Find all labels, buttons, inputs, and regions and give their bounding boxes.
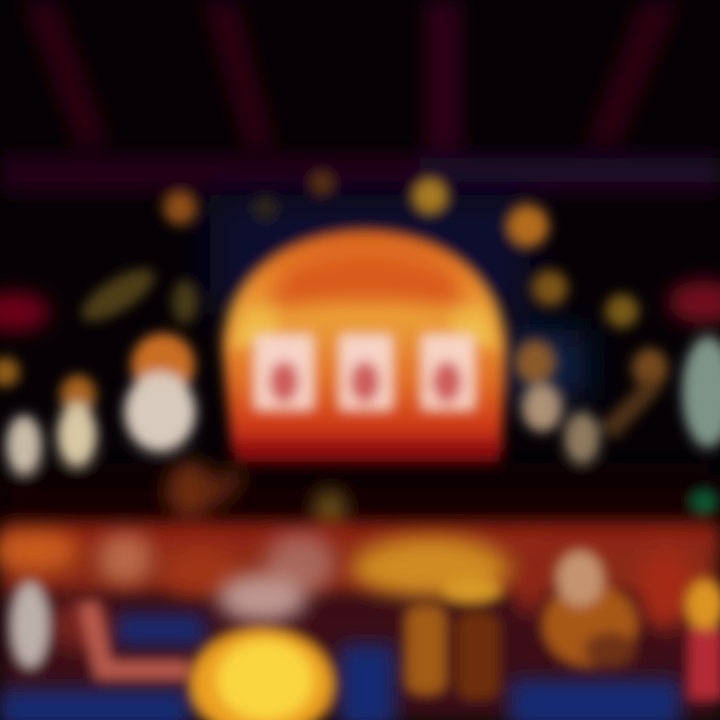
floor base (0, 530, 720, 600)
reel: right (421, 334, 475, 410)
figure: small (0, 357, 42, 475)
person: right (542, 550, 638, 668)
ceiling beams (0, 0, 720, 193)
red side lights (0, 280, 720, 332)
bright yellow orb (190, 628, 334, 720)
person: left white (10, 581, 50, 669)
person: pink arm (78, 600, 190, 680)
person: brown centre right (405, 577, 502, 700)
person: far right (685, 579, 720, 700)
yellow dome band (232, 299, 498, 350)
crowd colour patches (0, 525, 720, 651)
figure: large (124, 333, 196, 452)
coins (74, 170, 639, 331)
back wall glow (0, 195, 720, 520)
blue carpet (0, 615, 680, 720)
reel symbols (270, 362, 461, 402)
crowd floor (0, 525, 720, 720)
centre pedestal figures (166, 460, 346, 530)
right figures (515, 336, 720, 515)
figure: medium (57, 375, 97, 467)
person: centre (218, 574, 306, 622)
machine body (222, 230, 506, 452)
reel: middle (339, 334, 393, 410)
slot machine (222, 230, 506, 462)
machine base (235, 444, 500, 462)
red dome stripes (262, 256, 470, 312)
left figures (0, 333, 196, 475)
reel: left (254, 334, 314, 410)
